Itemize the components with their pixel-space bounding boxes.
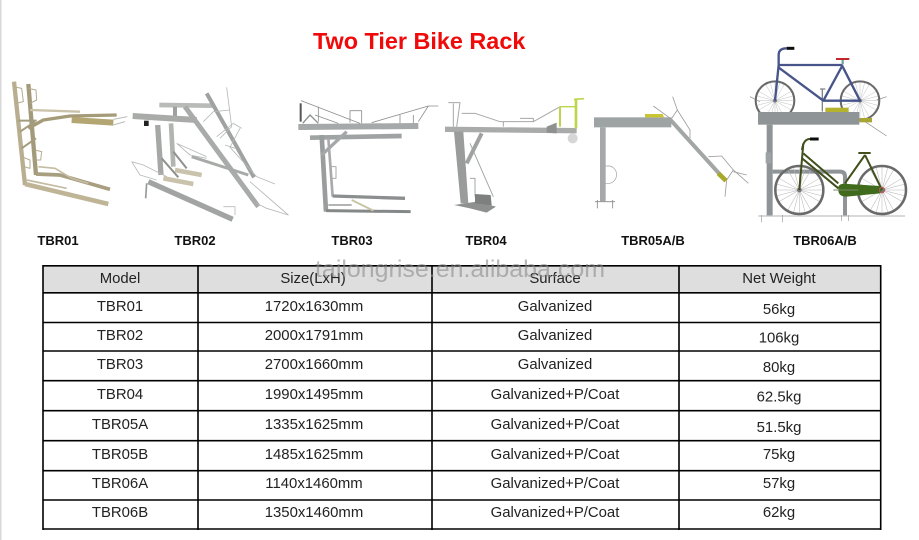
row TBR06A: 1140x1460mm — [265, 476, 363, 492]
row TBR04 — [97, 387, 801, 406]
row TBR01: 56kg — [763, 302, 795, 318]
row TBR04: 62.5kg — [757, 390, 801, 406]
illustration: TBR04 rack — [445, 99, 584, 213]
model labels: TBR04 — [465, 233, 507, 248]
upper bicycle — [750, 48, 887, 136]
row TBR01 — [97, 299, 795, 318]
row TBR01: 1720x1630mm — [265, 299, 363, 315]
model labels: TBR02 — [174, 233, 216, 248]
watermark: tailongrise.en.alibaba.com — [315, 256, 605, 283]
row TBR05B: TBR05B — [92, 447, 148, 463]
header row: Size(LxH) — [280, 271, 346, 287]
row TBR02: TBR02 — [97, 328, 143, 344]
model labels: TBR03 — [331, 233, 373, 248]
row TBR06A: TBR06A — [92, 476, 148, 492]
row TBR05A: TBR05A — [92, 417, 148, 433]
table header background — [43, 266, 881, 293]
lower bicycle — [775, 139, 906, 214]
specification table — [42, 265, 881, 530]
row TBR02: 2000x1791mm — [265, 328, 363, 344]
row TBR02: 106kg — [759, 330, 799, 346]
row TBR01: Galvanized — [518, 299, 592, 315]
row TBR03: Galvanized — [518, 357, 592, 373]
row TBR06A: Galvanized+P/Coat — [491, 476, 620, 492]
row TBR03: TBR03 — [97, 357, 143, 373]
header row: Model — [100, 271, 140, 287]
row TBR03 — [97, 357, 795, 376]
illustration: TBR01 rack — [13, 82, 127, 204]
row TBR06B: 62kg — [763, 505, 795, 521]
model labels — [37, 233, 857, 248]
model labels: TBR01 — [37, 233, 79, 248]
row TBR05B — [92, 447, 795, 463]
header row: Net Weight — [742, 271, 817, 287]
row TBR06B — [92, 505, 795, 521]
illustration: TBR05A/B rack — [594, 97, 748, 208]
table grid — [42, 265, 881, 530]
model labels: TBR05A/B — [621, 233, 685, 248]
row TBR05B: 75kg — [763, 447, 795, 463]
model labels: TBR06A/B — [793, 233, 857, 248]
lower tier frame — [758, 125, 905, 222]
row TBR06B: 1350x1460mm — [265, 505, 363, 521]
row TBR06B: TBR06B — [92, 505, 148, 521]
row TBR05B: Galvanized+P/Coat — [491, 447, 620, 463]
row TBR04: Galvanized+P/Coat — [491, 387, 620, 403]
row TBR04: 1990x1495mm — [265, 387, 363, 403]
illustration row: rack models — [13, 48, 906, 222]
row TBR06B: Galvanized+P/Coat — [491, 505, 620, 521]
row TBR05A: 1335x1625mm — [265, 417, 363, 433]
row TBR05A — [92, 417, 801, 436]
header row — [100, 271, 817, 287]
row TBR01: TBR01 — [97, 299, 143, 315]
row TBR06A — [92, 476, 795, 492]
row TBR06A: 57kg — [763, 476, 795, 492]
illustration: TBR06A/B rack with two bicycles — [750, 48, 906, 222]
row TBR05A: Galvanized+P/Coat — [491, 417, 620, 433]
illustration: TBR02 rack — [132, 87, 288, 219]
title: Two Tier Bike Rack — [313, 28, 526, 54]
row TBR04: TBR04 — [97, 387, 143, 403]
row TBR03: 2700x1660mm — [265, 357, 363, 373]
row TBR03: 80kg — [763, 360, 795, 376]
row TBR02: Galvanized — [518, 328, 592, 344]
row TBR05B: 1485x1625mm — [265, 447, 363, 463]
header row: Surface — [529, 271, 581, 287]
row TBR05A: 51.5kg — [757, 420, 801, 436]
illustration: TBR03 rack — [298, 101, 438, 212]
upper tier beam — [758, 108, 872, 125]
row TBR02 — [97, 328, 799, 346]
